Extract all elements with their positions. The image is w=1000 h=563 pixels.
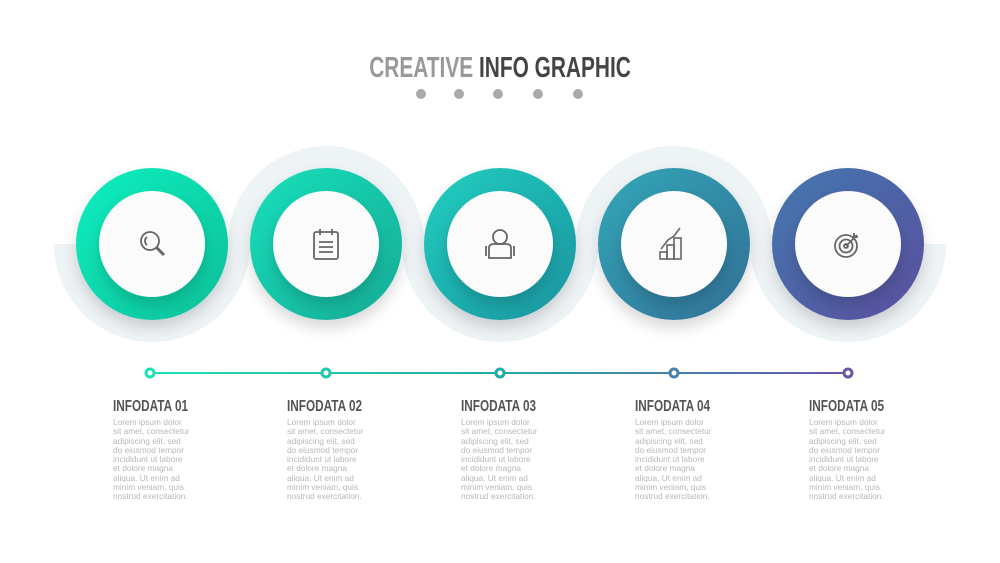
- text: aliqua. Ut enim ad: [635, 473, 702, 483]
- text: minim veniam, quis: [461, 482, 532, 492]
- icon: notepad: [314, 229, 338, 259]
- text: sit amet, consectetur: [461, 426, 538, 436]
- text: aliqua. Ut enim ad: [113, 473, 180, 483]
- step 1 text: [113, 398, 190, 501]
- text: nostrud exercitation.: [635, 491, 710, 501]
- step 3 text: [461, 398, 538, 501]
- text: INFODATA 03: [461, 398, 536, 415]
- text: et dolore magna: [461, 463, 521, 473]
- text: incididunt ut labore: [287, 454, 357, 464]
- text: sit amet, consectetur: [113, 426, 190, 436]
- circle 1: [76, 168, 228, 320]
- text: nostrud exercitation.: [113, 491, 188, 501]
- timeline: [146, 369, 852, 377]
- circle 2: [250, 168, 402, 320]
- text: aliqua. Ut enim ad: [809, 473, 876, 483]
- text: Lorem ipsum dolor: [287, 417, 356, 427]
- circle 4: [598, 168, 750, 320]
- text: et dolore magna: [635, 463, 695, 473]
- text: incididunt ut labore: [461, 454, 531, 464]
- step 2 text: [287, 398, 364, 501]
- text: INFODATA 05: [809, 398, 884, 415]
- text: adipiscing elit, sed: [635, 436, 703, 446]
- text: aliqua. Ut enim ad: [461, 473, 528, 483]
- text: sit amet, consectetur: [635, 426, 712, 436]
- text: do eiusmod tempor: [113, 445, 184, 455]
- text: adipiscing elit, sed: [113, 436, 181, 446]
- text: Lorem ipsum dolor: [809, 417, 878, 427]
- text: minim veniam, quis: [287, 482, 358, 492]
- icon: person: [486, 230, 514, 258]
- text: aliqua. Ut enim ad: [287, 473, 354, 483]
- text: do eiusmod tempor: [809, 445, 880, 455]
- text: sit amet, consectetur: [809, 426, 886, 436]
- icon: target: [835, 233, 858, 257]
- text: minim veniam, quis: [113, 482, 184, 492]
- text: et dolore magna: [113, 463, 173, 473]
- text: incididunt ut labore: [113, 454, 183, 464]
- text: sit amet, consectetur: [287, 426, 364, 436]
- circle 3: [424, 168, 576, 320]
- text: INFODATA 01: [113, 398, 188, 415]
- text: adipiscing elit, sed: [461, 436, 529, 446]
- text: INFODATA 04: [635, 398, 710, 415]
- icon: chart: [660, 228, 681, 259]
- title dots: [416, 89, 583, 99]
- text: Lorem ipsum dolor: [461, 417, 530, 427]
- text: incididunt ut labore: [635, 454, 705, 464]
- text: nostrud exercitation.: [461, 491, 536, 501]
- text: do eiusmod tempor: [461, 445, 532, 455]
- text: INFODATA 02: [287, 398, 362, 415]
- text: et dolore magna: [809, 463, 869, 473]
- text: minim veniam, quis: [635, 482, 706, 492]
- text: et dolore magna: [287, 463, 347, 473]
- title: CREATIVE INFO GRAPHIC: [369, 52, 631, 84]
- text: incididunt ut labore: [809, 454, 879, 464]
- text: adipiscing elit, sed: [287, 436, 355, 446]
- icon: magnifier: [141, 232, 164, 255]
- text: Lorem ipsum dolor: [113, 417, 182, 427]
- text: Lorem ipsum dolor: [635, 417, 704, 427]
- background half rings: [54, 146, 946, 342]
- text: adipiscing elit, sed: [809, 436, 877, 446]
- step 5 text: [809, 398, 886, 501]
- text: nostrud exercitation.: [809, 491, 884, 501]
- text: do eiusmod tempor: [287, 445, 358, 455]
- step 4 text: [635, 398, 712, 501]
- text: nostrud exercitation.: [287, 491, 362, 501]
- text: minim veniam, quis: [809, 482, 880, 492]
- circle 5: [772, 168, 924, 320]
- text: do eiusmod tempor: [635, 445, 706, 455]
